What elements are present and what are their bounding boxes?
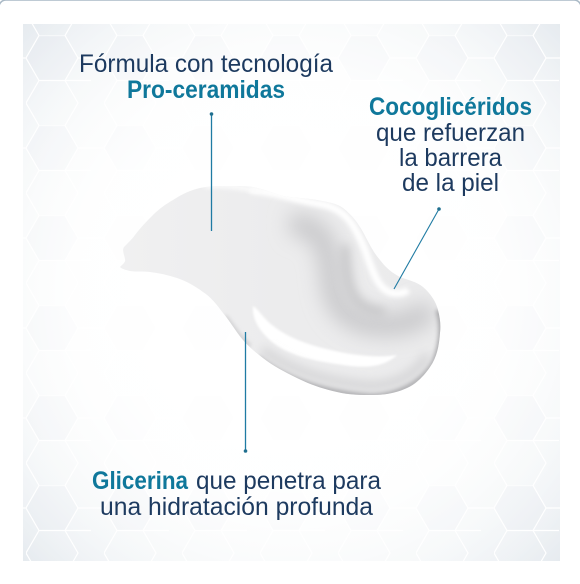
text block: Fórmula con tecnología Pro-ceramidas: Fórmula con tecnología [79, 50, 333, 78]
lower-lobe glossy highlight [253, 306, 397, 367]
bottom rim shadow [258, 310, 441, 396]
text block: Fórmula con tecnología Pro-ceramidas [79, 50, 333, 104]
text block: Cocoglicéridos: de la piel [402, 169, 499, 197]
text block: Fórmula con tecnología Pro-ceramidas: Pro-ceramidas [127, 76, 285, 104]
text block: Cocoglicéridos [369, 93, 532, 197]
shadow ridge [290, 225, 430, 325]
text block: Glicerina: que penetra para [196, 467, 381, 495]
callout line: Cocoglicéridos [394, 207, 441, 289]
text block: Glicerina: una hidratación profunda [100, 493, 373, 521]
text block: Cocoglicéridos: la barrera [399, 144, 502, 172]
callout line: Glicerina [244, 332, 247, 453]
text block: Cocoglicéridos: que refuerzan [376, 119, 525, 147]
cream swatch [120, 185, 441, 396]
text block: Glicerina: Glicerina [92, 467, 189, 495]
upper-edge highlight [250, 190, 408, 293]
text block: Glicerina [92, 467, 381, 521]
text block: Cocoglicéridos: Cocoglicéridos [369, 93, 532, 121]
callout line: Pro-ceramidas [210, 112, 213, 231]
